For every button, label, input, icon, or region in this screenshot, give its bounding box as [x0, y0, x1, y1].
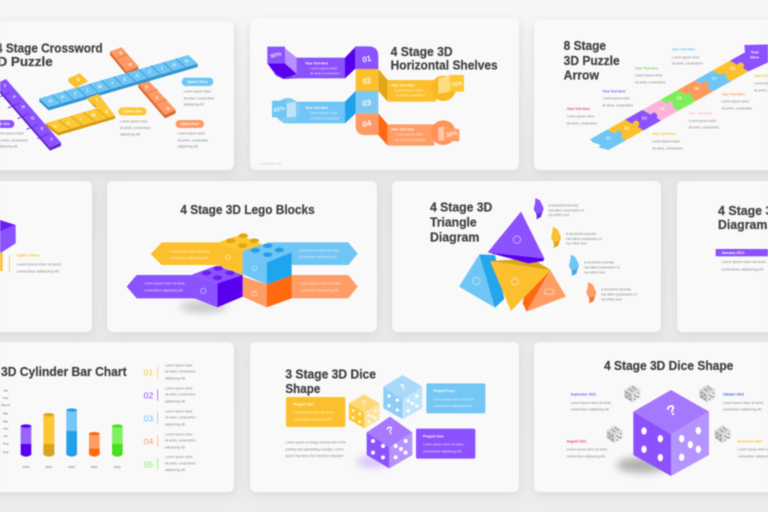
- label: option four: Lorem ipsum dolor: [178, 132, 206, 136]
- label: september: Lorem ipsum dolor sit amet,: [571, 401, 612, 405]
- pyramid: yellow face: [490, 258, 551, 311]
- yellow word tiles: [46, 73, 115, 135]
- purple word tiles: TARGET: T: [50, 137, 53, 143]
- panel: partial lego slide left: [0, 181, 92, 332]
- title: puzzle arrow: Arrow: [564, 68, 599, 82]
- title: triangle diagram: 4 Stage 3D: [430, 201, 492, 215]
- arrow banners: Lorem ipsum dolor sit amet,: [298, 248, 339, 252]
- label: option four: Option Four: [180, 122, 200, 126]
- item 4 orange ribbon: [587, 282, 637, 303]
- step labels: Your Text Here: [602, 89, 626, 93]
- x axis labels: 2022: [114, 465, 121, 469]
- puzzle arrow band: Here: [750, 54, 760, 59]
- shelf 02 yellow: Lorem ipsum dolor: [396, 88, 424, 92]
- x axis labels: 2018: [23, 465, 30, 469]
- yellow die: ?: [361, 400, 368, 408]
- title: 3 stage dice: [285, 367, 376, 396]
- label: august: Lorem ipsum dolor sit amet,: [567, 448, 608, 452]
- label: oktober: Lorem ipsum dolor sit amet,: [723, 401, 764, 405]
- blue word tiles: OPTIMIZATION: T: [148, 70, 151, 76]
- shelf 04 orange: 30%: [446, 131, 458, 139]
- label: option three: [182, 78, 215, 107]
- arrow banners: [127, 242, 358, 298]
- label: option three: Option Three: [187, 80, 208, 84]
- title: puzzle arrow: 3D Puzzle: [564, 54, 620, 68]
- body text: [285, 441, 346, 458]
- blue word tiles: OPTIMIZATION: I: [112, 80, 114, 86]
- panel: 4 stage 3D triangle diagram: [392, 181, 661, 332]
- y axis labels: March: [1, 403, 10, 407]
- label: option four: [176, 120, 209, 149]
- label: option two: Lorem ipsum dolor: [120, 119, 148, 123]
- orange word tiles: R: [145, 85, 149, 91]
- shelf 01 purple: 01: [361, 54, 373, 64]
- list text: [165, 363, 197, 472]
- purple block: [193, 266, 243, 307]
- pyramid: orange face: [523, 261, 566, 312]
- step labels: Lorem ipsum dolor: [652, 140, 681, 144]
- step labels: Lorem ipsum dolor: [567, 115, 595, 119]
- shelf 02 yellow: [356, 69, 464, 102]
- yellow word tiles: M: [91, 113, 95, 119]
- blue word tiles: OPTIMIZATION: N: [185, 59, 189, 65]
- arrow banners: consectetur adipiscing elit.: [169, 256, 208, 260]
- project four box: [426, 383, 485, 413]
- shelf 04 orange: sit amet consectetur: [396, 138, 426, 142]
- label: option one: [0, 120, 29, 149]
- shelf 04 orange: Your Text Here: [391, 128, 414, 132]
- item 2 yellow ribbon: A wonderful serenity: [566, 232, 596, 236]
- list text: adipiscing elit.: [165, 468, 186, 472]
- list text: Lorem ipsum dolor: [165, 363, 193, 367]
- arrow banners: Lorem ipsum dolor sit amet,: [300, 282, 341, 286]
- y axis labels: Jun: [3, 426, 8, 430]
- shelf 02 yellow: sit amet consectetur: [396, 94, 426, 98]
- january label bar: [716, 249, 768, 271]
- y axis labels: Feb: [3, 396, 8, 400]
- project two box: [286, 397, 345, 427]
- shelf 03 blue: 03: [361, 98, 373, 108]
- glow under die: [357, 456, 390, 468]
- purple word tiles: TARGET: G: [31, 115, 35, 121]
- numbered list: 02: [144, 391, 153, 401]
- title: horizontal shelves: [391, 45, 498, 72]
- blue word tiles: OPTIMIZATION: Z: [123, 77, 126, 83]
- yellow word tiles: N: [53, 124, 57, 130]
- blue word tiles: OPTIMIZATION: P: [61, 95, 65, 101]
- yellow word tiles: K: [105, 109, 109, 115]
- big purple die: ?: [665, 402, 679, 420]
- shadow: [180, 301, 227, 313]
- label: august: August 2021: [567, 439, 587, 443]
- step labels: sit amet, consectetur: [689, 126, 720, 130]
- list text: adipiscing elit.: [165, 399, 186, 403]
- label: september: September 2021: [571, 393, 596, 397]
- panel: partial diagram slide right: [677, 181, 768, 332]
- purple word tiles: TARGET: E: [41, 126, 45, 132]
- step labels: Lorem ipsum dolor: [602, 97, 631, 101]
- shelf 03 blue: 60%: [273, 106, 286, 114]
- project two box: Project Two: [293, 402, 314, 406]
- item 4 orange ribbon: A wonderful serenity: [601, 288, 631, 292]
- step labels: Your Text Here: [652, 132, 676, 136]
- puzzle arrow band: 05: [677, 96, 682, 101]
- january label bar: consectetur adipiscing elit.: [721, 267, 764, 271]
- title: lego blocks: 4 Stage 3D Lego Blocks: [180, 203, 315, 217]
- shelf 01 purple: 90%: [270, 51, 282, 60]
- step labels: sit amet, consectetur: [652, 147, 684, 151]
- purple word tiles: TARGET: T: [3, 83, 7, 89]
- blue block: [243, 243, 292, 284]
- shelf 03 blue: Your Text Here: [305, 106, 328, 110]
- shelf 01 purple: Lorem ipsum dolor: [310, 66, 338, 70]
- purple word tiles: TARGET: A: [13, 94, 17, 100]
- label: option two: [118, 107, 152, 137]
- puzzle arrow band: 04: [659, 106, 665, 111]
- step labels: Lorem ipsum dolor: [689, 119, 717, 123]
- body text: Ipsum has been the industry's standard: [285, 454, 343, 458]
- step labels: sit amet, consectetur: [672, 62, 704, 66]
- orange word tiles: H: [166, 106, 170, 112]
- pyramid: purple face: [488, 212, 544, 263]
- yellow word tiles: B: [77, 77, 81, 83]
- shelf 04 orange: [356, 113, 459, 146]
- item 1 purple ribbon: A wonderful serenity: [548, 203, 579, 207]
- shelf 01 purple: sit amet consectetur: [310, 72, 341, 76]
- shelf 04 orange: Lorem ipsum dolor: [396, 133, 424, 137]
- label: oktober: Oktober 2021: [723, 393, 744, 397]
- puzzle arrow band: 08: [730, 66, 736, 71]
- label: option three: Lorem ipsum dolor: [184, 90, 212, 94]
- title: triangle diagram: Diagram: [430, 230, 479, 244]
- blue word tiles: OPTIMIZATION: M: [98, 84, 102, 90]
- label: option two: sit amet, consectetur: [120, 126, 152, 130]
- blue die: [383, 375, 422, 419]
- panel: 8 stage 3D puzzle arrow: [534, 20, 768, 170]
- footer text: www.website.com: [260, 161, 282, 165]
- purple die: [367, 417, 412, 468]
- orange word tiles: E: [129, 62, 133, 68]
- yellow word tiles: I: [80, 117, 82, 123]
- option three text: Lorem ipsum dolor sit amet,: [17, 263, 62, 267]
- item 2 yellow ribbon: has taken possession of: [566, 237, 602, 241]
- step labels: Your Text Here: [635, 66, 658, 70]
- shelf 01 purple: Your Text Here: [305, 61, 328, 65]
- y axis labels: Jan: [3, 389, 8, 393]
- project one box: Project One: [423, 434, 444, 438]
- puzzle arrow band: 07: [712, 76, 717, 81]
- list text: Lorem ipsum dolor: [165, 409, 193, 413]
- item 3 blue ribbon: has taken possession of: [584, 266, 620, 270]
- label: november: November 2021: [738, 439, 762, 443]
- title: horizontal shelves: Horizontal Shelves: [391, 58, 498, 72]
- label: option two: adipiscing elit.: [120, 133, 141, 137]
- y axis labels: Mar: [3, 411, 9, 415]
- step labels: Your Text Here: [567, 107, 590, 111]
- label: august: [567, 439, 608, 458]
- title: crossword puzzle: [0, 42, 103, 69]
- y axis labels: Sep: [3, 450, 9, 454]
- panel: 4 stage 3D dice shape: [534, 342, 768, 492]
- title: triangle diagram: Triangle: [430, 215, 477, 229]
- x axis labels: 2020: [68, 465, 75, 469]
- project two box: consectetur adipiscing elit.: [293, 417, 332, 421]
- step labels: Your Text Here: [672, 47, 695, 51]
- blue word tiles: OPTIMIZATION: I: [161, 66, 163, 72]
- purple word tiles: TARGET: [0, 79, 61, 151]
- step labels: sit amet, consectetur: [722, 106, 753, 110]
- blue word tiles: OPTIMIZATION: O: [48, 98, 52, 104]
- puzzle arrow band: 02: [624, 126, 630, 131]
- arrow banners: consectetur adipiscing elit.: [300, 288, 339, 292]
- step labels: [567, 47, 768, 151]
- list text: adipiscing elit.: [165, 422, 186, 426]
- small gray dice: [607, 385, 731, 443]
- y axis labels: Jul: [4, 434, 8, 438]
- title: cylinder bar chart: 3D Cylinder Bar Chart: [1, 365, 127, 379]
- arrow banners: consectetur adipiscing elit.: [144, 288, 183, 292]
- list text: sit amet, consectetur: [165, 370, 197, 374]
- january label bar: January 2021: [721, 251, 745, 255]
- option three text: [9, 253, 62, 273]
- item 2 yellow ribbon: [551, 227, 602, 248]
- title: 3 stage dice: Shape: [285, 382, 320, 396]
- y axis labels: Mei: [3, 419, 8, 423]
- option three text: consectetur adipiscing elit.: [17, 269, 60, 273]
- option three text: Option Three: [17, 253, 39, 257]
- arrow banners: consectetur adipiscing elit.: [298, 255, 337, 259]
- yellow word tiles: T: [95, 98, 98, 104]
- item 3 blue ribbon: my entire soul: [584, 270, 605, 274]
- item 4 orange ribbon: my entire soul: [601, 297, 622, 301]
- blue word tiles: OPTIMIZATION: T: [73, 91, 77, 97]
- panel: 4 stage 3D lego blocks: [107, 181, 377, 332]
- list text: Lorem ipsum dolor: [165, 455, 193, 459]
- project one box: [416, 429, 475, 459]
- list text: adipiscing elit.: [165, 445, 186, 449]
- label: option four: adipiscing elit.: [178, 145, 199, 149]
- shelf 02 yellow: 70%: [451, 81, 463, 89]
- title: fragment: [718, 204, 768, 232]
- yellow block: [217, 233, 263, 275]
- label: august: consectetur adipiscing elit.: [567, 454, 606, 458]
- label: oktober: [723, 393, 764, 412]
- step labels: sit amet, consectetur: [635, 80, 667, 84]
- puzzle arrow band: 06: [694, 86, 700, 91]
- orange word tiles: [110, 47, 176, 118]
- item 1 purple ribbon: [534, 198, 584, 219]
- label: oktober: consectetur adipiscing elit.: [723, 408, 762, 412]
- title: triangle diagram: [430, 201, 492, 244]
- title: puzzle arrow: [564, 39, 620, 82]
- label: option three: sit amet, consectetur: [184, 96, 215, 100]
- project four box: Project Four: [433, 389, 455, 393]
- label: option two: Option Two: [123, 109, 141, 113]
- step labels: Lorem ipsum dolor: [722, 100, 750, 104]
- list text: sit amet, consectetur: [165, 393, 197, 397]
- step labels: Your Text Here: [722, 92, 745, 96]
- y axis labels: Aug: [3, 441, 9, 445]
- shelf 02 yellow: 02: [361, 76, 373, 86]
- shelf 03 blue: sit amet consectetur: [310, 116, 341, 120]
- step labels: sit amet, consectetur: [567, 122, 598, 126]
- orange word tiles: S: [119, 51, 123, 57]
- project one box: consectetur adipiscing elit.: [423, 449, 462, 453]
- purple word tiles: TARGET: R: [22, 105, 26, 111]
- shelf 04 orange: 04: [361, 118, 373, 129]
- shelf 03 blue: [272, 91, 378, 123]
- title: fragment: Diagram: [718, 218, 767, 232]
- arrow banners: Lorem ipsum dolor sit amet,: [144, 282, 185, 286]
- panel: 4 stage 3D horizontal shelves: [250, 18, 519, 170]
- label: september: [571, 393, 612, 412]
- lego blocks fragment: [0, 220, 16, 271]
- puzzle arrow band: 03: [642, 116, 647, 121]
- list text: Lorem ipsum dolor: [165, 386, 193, 390]
- title: 3 stage dice: 3 Stage 3D Dice: [285, 367, 376, 381]
- numbered list: [144, 367, 158, 470]
- purple die: ?: [385, 424, 395, 438]
- item 4 orange ribbon: has taken possession of: [601, 293, 637, 297]
- x axis labels: [23, 465, 121, 469]
- item 3 blue ribbon: A wonderful serenity: [584, 261, 614, 265]
- panel: 3D cylinder bar chart: [0, 342, 234, 492]
- list text: sit amet, consectetur: [165, 461, 197, 465]
- project one box: Lorem ipsum dolor sit amet,: [423, 443, 464, 447]
- list text: adipiscing elit.: [165, 376, 186, 380]
- puzzle arrow band: [590, 44, 768, 150]
- bars: [21, 408, 123, 457]
- pyramid: blue face: [459, 254, 504, 308]
- label: september: consectetur adipiscing elit.: [571, 408, 610, 412]
- yellow word tiles: U: [67, 120, 71, 126]
- numbered list: 04: [144, 437, 153, 447]
- list text: sit amet, consectetur: [165, 416, 197, 420]
- project four box: consectetur adipiscing elit.: [433, 404, 472, 408]
- panel: 4 stage crossword 3D puzzle: [0, 21, 234, 170]
- blue word tiles: OPTIMIZATION: O: [172, 62, 176, 68]
- list text: Lorem ipsum dolor: [165, 432, 193, 436]
- puzzle arrow band: 01: [606, 135, 612, 140]
- january label bar: Lorem ipsum dolor sit amet,: [721, 260, 766, 264]
- yellow die: [349, 394, 379, 428]
- list text: sit amet, consectetur: [165, 439, 197, 443]
- shelf 01 purple: [267, 46, 378, 79]
- title: horizontal shelves: 4 Stage 3D: [391, 45, 453, 59]
- label: november: [738, 439, 768, 458]
- body text: printing and typesetting industry. Lorem: [285, 447, 344, 451]
- label: option three: adipiscing elit.: [184, 103, 205, 107]
- numbered list: 05: [144, 460, 153, 470]
- step labels: Lorem ipsum dolor: [672, 55, 700, 59]
- shadow: [617, 457, 667, 473]
- big purple die: [633, 390, 709, 476]
- shelf 03 blue: Lorem ipsum dolor: [310, 111, 338, 115]
- blue word tiles: OPTIMIZATION: A: [135, 73, 139, 79]
- step labels: Lorem ipsum dolor: [635, 74, 663, 78]
- title: 4 stage dice: 4 Stage 3D Dice Shape: [604, 359, 733, 373]
- item 3 blue ribbon: [569, 255, 620, 276]
- orange block: [243, 276, 292, 307]
- item 2 yellow ribbon: my entire soul: [566, 242, 587, 246]
- blue word tiles: OPTIMIZATION: [39, 55, 198, 110]
- step labels: Your Text Here: [689, 111, 712, 115]
- x axis labels: 2021: [91, 465, 98, 469]
- label: option four: sit amet, consectetur: [178, 138, 209, 142]
- y axis labels: [1, 389, 10, 454]
- orange word tiles: C: [156, 95, 160, 101]
- numbered list: 03: [144, 414, 153, 424]
- arrow banners: Lorem ipsum dolor sit amet,: [169, 249, 210, 253]
- blue word tiles: OPTIMIZATION: I: [87, 88, 89, 94]
- project four box: Lorem ipsum dolor sit amet,: [433, 397, 474, 401]
- panel: 3 stage 3D dice shape: [250, 342, 519, 492]
- item 1 purple ribbon: my entire soul: [548, 213, 569, 217]
- puzzle arrow band: Text: [751, 49, 759, 54]
- numbered list: 01: [144, 368, 153, 378]
- blue die: ?: [398, 381, 407, 393]
- body text: Lorem Ipsum is simply dummy text of the: [285, 441, 346, 445]
- step labels: sit amet, consectetur: [602, 104, 634, 108]
- title: puzzle arrow: 8 Stage: [564, 39, 606, 53]
- project two box: Lorem ipsum dolor sit amet,: [293, 411, 334, 415]
- x axis labels: 2019: [45, 465, 52, 469]
- shelf 02 yellow: Your Text Here: [391, 83, 414, 87]
- item 1 purple ribbon: has taken possession of: [548, 208, 584, 212]
